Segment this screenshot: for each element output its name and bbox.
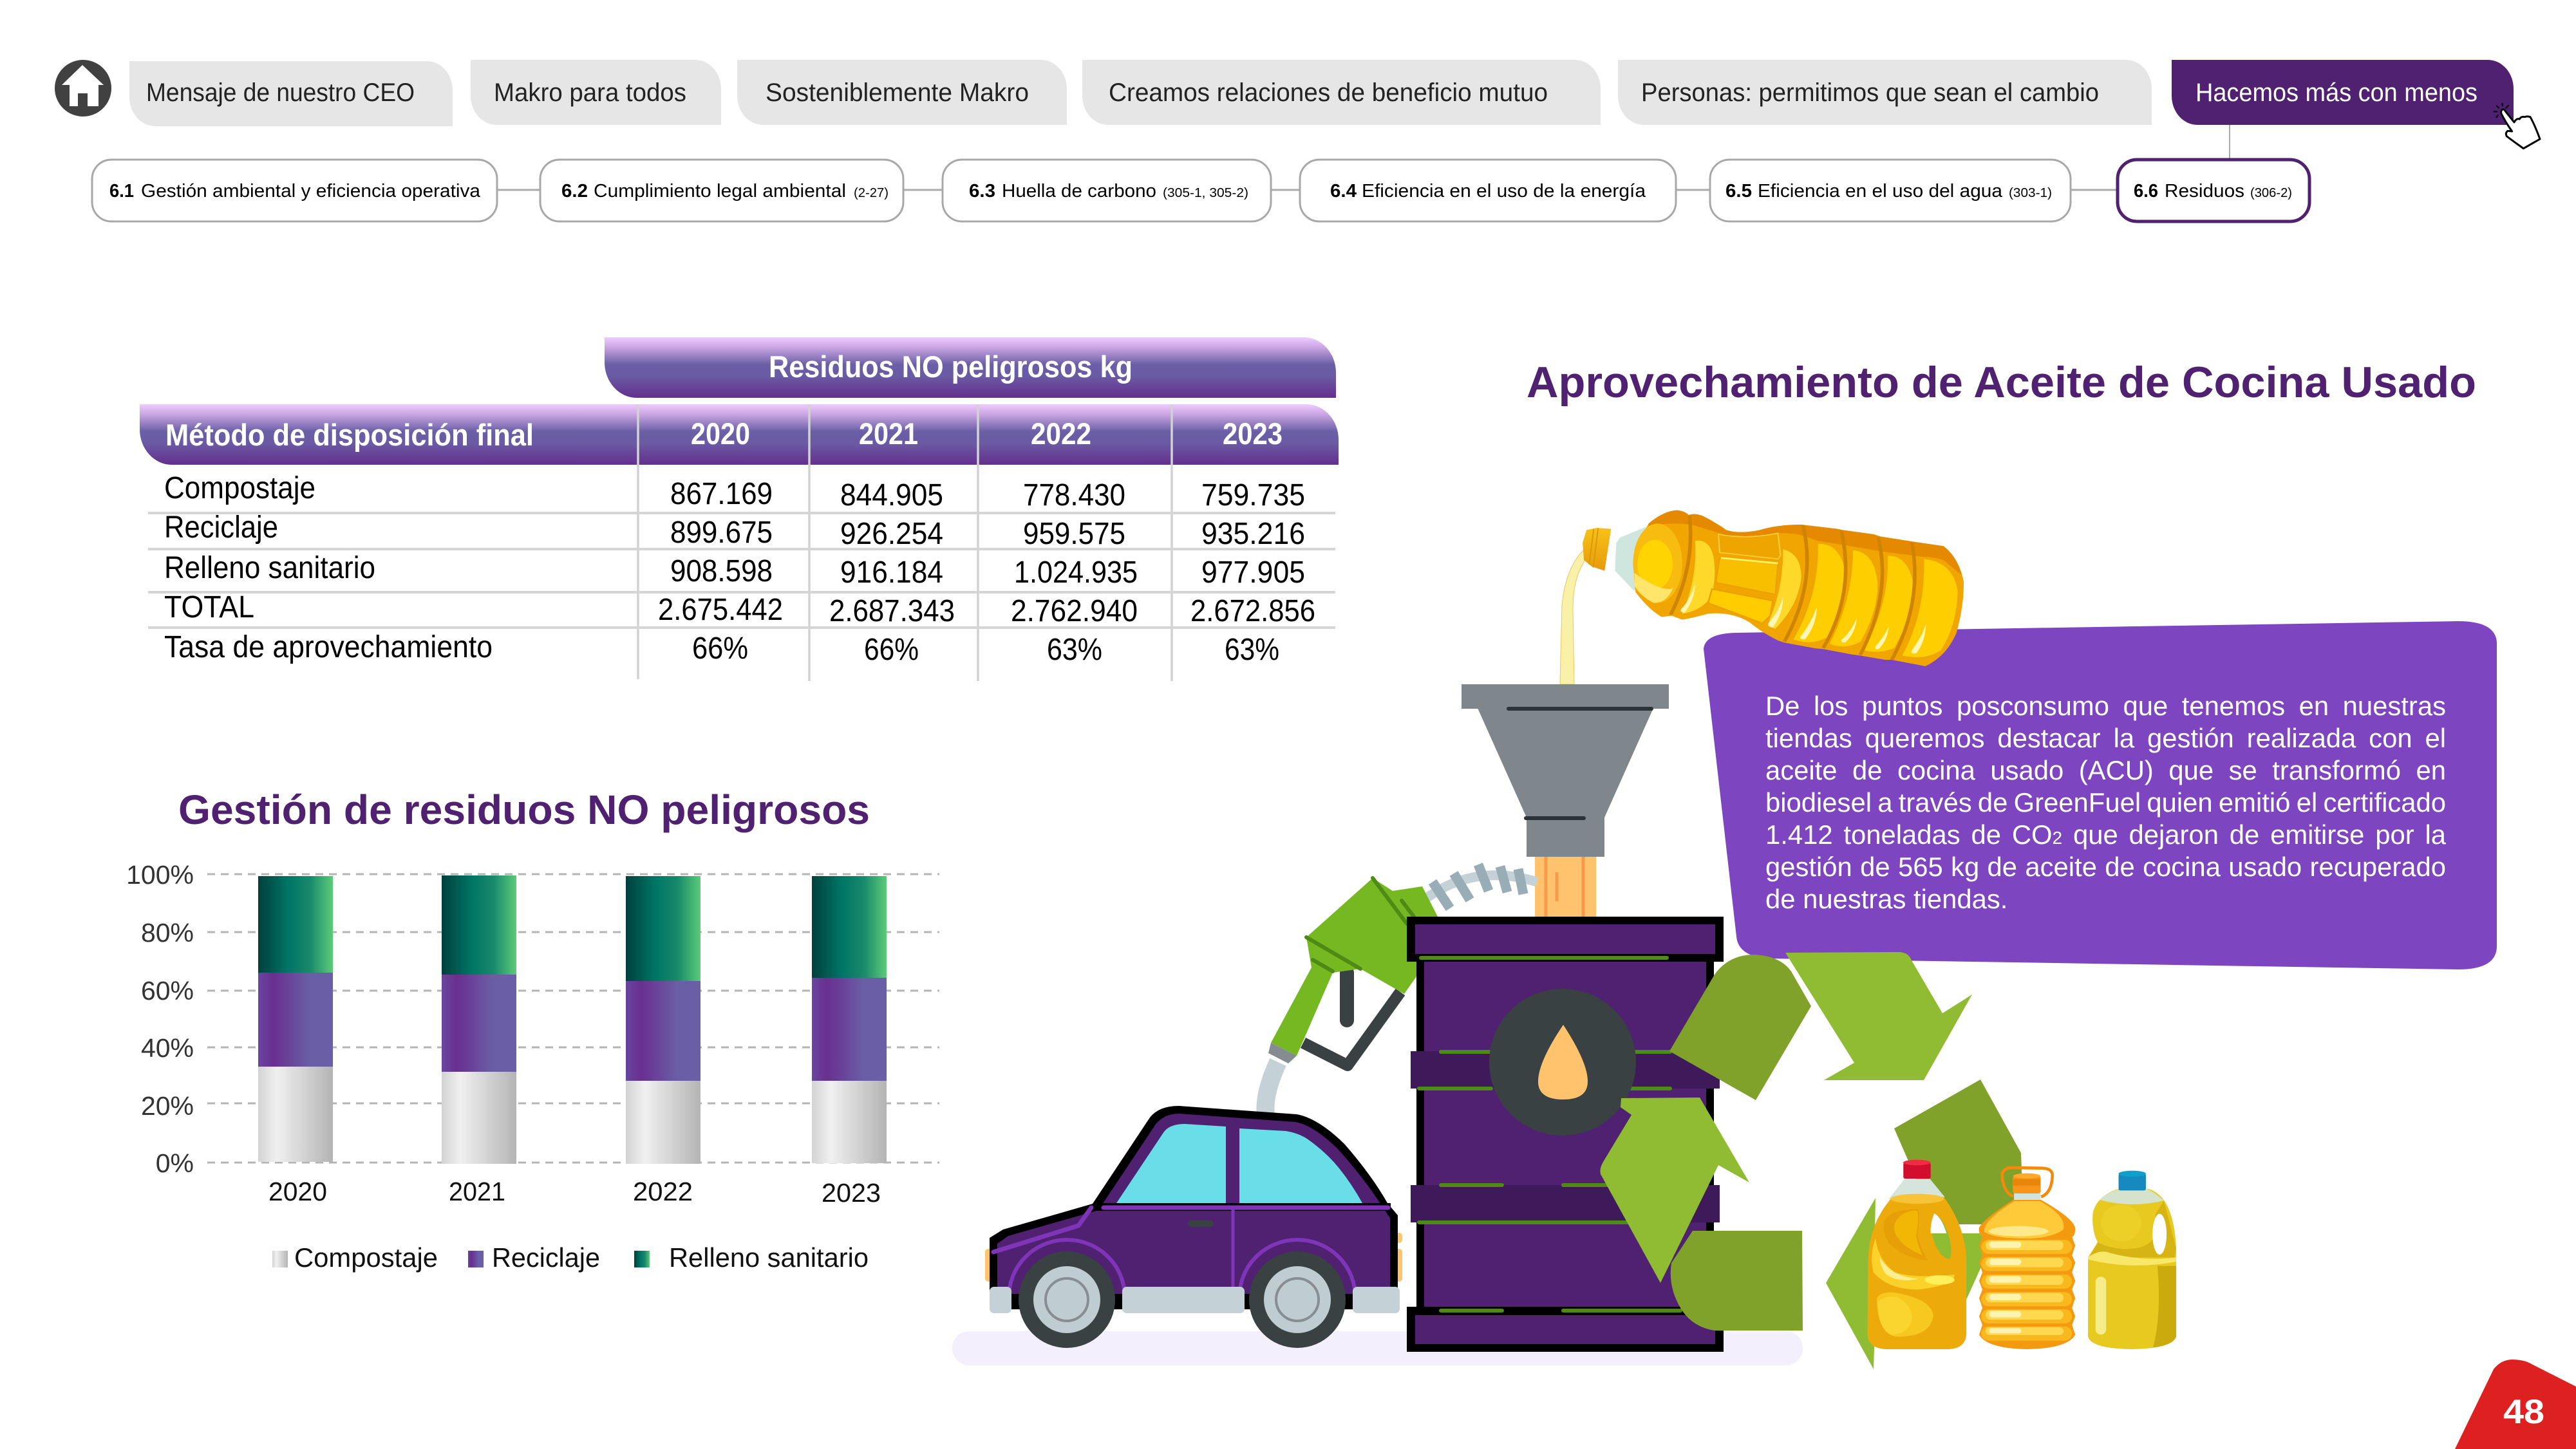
y axis labels: 60% [141,976,194,1005]
pill 6.5: Eficiencia en el uso del agua [1758,181,2003,201]
table body text: 899.675 [670,516,773,550]
table body text: 844.905 [840,478,943,512]
pill 6.6 active: 6.6 [2134,181,2158,201]
table body text: Relleno sanitario [164,551,375,585]
pill 6.5: (303-1) [2009,186,2052,200]
table column header: Método de disposición final [165,418,534,452]
tab: Makro para todos [471,60,721,125]
table super header [605,337,1336,398]
table body text: 867.169 [670,477,773,511]
legend: Compostaje [294,1242,438,1273]
table body text: 1.024.935 [1014,556,1138,590]
legend [272,1242,869,1273]
pill 6.2: 6.2 [561,181,588,201]
table column header: 2021 [859,416,918,451]
pill 6.1: 6.1 [109,181,134,201]
illustration: funnel [1462,684,1669,857]
pill 6.6 active: (306-2) [2250,186,2292,200]
x axis labels: 2021 [449,1177,505,1206]
pill 6.1 [92,160,497,221]
table body text: 2.675.442 [658,593,783,627]
navigation bar [55,60,2514,126]
wheels [1019,1251,1346,1348]
x axis labels: 2022 [633,1177,693,1206]
table column header: 2020 [691,416,750,451]
table body text: 63% [1047,633,1102,667]
pill 6.1: Gestión ambiental y eficiencia operativa [141,181,481,201]
chart title: Gestión de residuos NO peligrosos [178,787,870,833]
table body text: 778.430 [1023,478,1125,512]
table column header: 2023 [1223,416,1283,451]
callout panel [1704,621,2497,969]
table body text: 908.598 [670,554,773,588]
sub navigation [92,125,2309,221]
table body text: Tasa de aprovechamiento [164,630,493,664]
callout text: tiendas queremos destacar la gestión realizada con el [1765,723,2446,753]
pill 6.2: Cumplimiento legal ambiental [594,181,846,201]
illustration: ribbed oil bottle [1979,1168,2075,1349]
table body text: 959.575 [1023,517,1125,551]
y axis labels: 20% [141,1091,194,1121]
table body text [164,471,1315,667]
table body text: 935.216 [1201,517,1305,551]
pill 6.5: 6.5 [1725,181,1752,201]
x axis labels [268,1177,881,1208]
tab: Sosteniblemente Makro: Sosteniblemente Makro [766,79,1029,107]
illustration: car [985,1106,1402,1348]
table body text: 66% [864,633,919,667]
callout text: aceite de cocina usado (ACU) que se transformó en [1765,755,2446,785]
tab: Hacemos más con menos [2172,60,2514,125]
illustration: orange pipe [1535,857,1596,917]
table body text: 2.687.343 [829,594,955,628]
tab: Makro para todos: Makro para todos [494,79,686,107]
bar 2020 [258,876,333,1162]
pill 6.3 [943,160,1271,221]
tab: Creamos relaciones de beneficio mutuo: Creamos relaciones de beneficio mutuo [1109,79,1548,107]
table body text: 66% [692,631,748,666]
icon: home [55,60,111,117]
y axis labels: 100% [126,860,194,890]
table body text: 759.735 [1201,478,1305,512]
x axis labels: 2020 [268,1177,327,1206]
illustration: barrel [1407,917,1724,1352]
illustration: fuel nozzle [1268,878,1438,1065]
table body text: 926.254 [840,517,943,551]
bar 2023 [812,876,887,1163]
pill 6.3: Huella de carbono [1002,181,1156,201]
y axis labels: 80% [141,918,194,948]
table column header: 2022 [1031,416,1091,451]
y axis labels: 40% [141,1033,194,1063]
icon: hand cursor [2494,103,2540,149]
table body text: Reciclaje [164,510,278,545]
pill 6.4 [1300,160,1676,221]
page number badge [2455,1360,2576,1449]
callout text [1765,689,2448,921]
pill 6.3: 6.3 [969,181,995,201]
illustration: recycling arrows [1601,952,2024,1369]
y axis labels: 0% [156,1148,194,1178]
tab: Creamos relaciones de beneficio mutuo [1082,60,1601,125]
tab: Mensaje de nuestro CEO [129,61,453,126]
x axis labels: 2023 [822,1178,881,1208]
tab: Hacemos más con menos: Hacemos más con menos [2195,79,2477,107]
table column header [140,404,1339,465]
pill 6.3: (305-1, 305-2) [1163,186,1248,200]
pill 6.6 active [2118,160,2309,221]
icon: oil drop badge [1489,989,1636,1136]
page number badge: 48 [2503,1393,2544,1431]
tab: Personas [1618,60,2152,125]
table: residuos no peligrosos [140,337,1339,681]
illustration: pouring oil bottle [1583,510,1964,666]
callout text: De los puntos posconsumo que tenemos en nuestras [1765,691,2446,721]
bar 2021 [442,875,516,1164]
right heading: Aprovechamiento de Aceite de Cocina Usado [1527,358,2476,407]
illustration: oil bottle blue cap [2088,1171,2176,1349]
callout text: de nuestras tiendas. [1765,884,2007,914]
legend: Relleno sanitario [669,1242,869,1273]
table body text: TOTAL [164,590,254,624]
callout text: biodiesel a través de GreenFuel quien emitió el certificado [1765,787,2446,818]
bar 2022 [626,876,700,1164]
illustration: pouring oil stream [1560,548,1590,684]
illustration: oil bottle red cap [1868,1160,1966,1349]
pill 6.4: 6.4 [1330,181,1357,201]
table body text: 2.762.940 [1011,594,1138,628]
y axis labels [126,860,194,1178]
stacked bar chart [126,860,939,1273]
pill 6.2 [540,160,903,221]
callout text: 1.412 toneladas de CO2 que dejaron de emitirse por la [1765,819,2446,850]
table body text: Compostaje [164,471,315,505]
table super header: Residuos NO peligrosos kg [769,350,1133,384]
pill 6.2: (2-27) [854,186,888,200]
pill 6.5 [1710,160,2071,221]
callout text: gestión de 565 kg de aceite de cocina usado recuperado [1765,852,2446,882]
tab: Mensaje de nuestro CEO: Mensaje de nuestro CEO [146,79,415,107]
tab: Sosteniblemente Makro [737,60,1067,125]
illustration: fuel hose [1265,865,1537,1115]
pill 6.4: Eficiencia en el uso de la energía [1362,181,1646,201]
table body text: 63% [1225,633,1279,667]
table body text: 2.672.856 [1190,594,1315,628]
table body text: 916.184 [840,556,943,590]
table body text: 977.905 [1201,556,1305,590]
illustration: ground shadow [952,1331,1803,1365]
tab: Personas: Personas: permitimos que sean el cambio [1641,79,2099,107]
pill 6.6 active: Residuos [2165,181,2244,201]
legend: Reciclaje [492,1242,600,1273]
